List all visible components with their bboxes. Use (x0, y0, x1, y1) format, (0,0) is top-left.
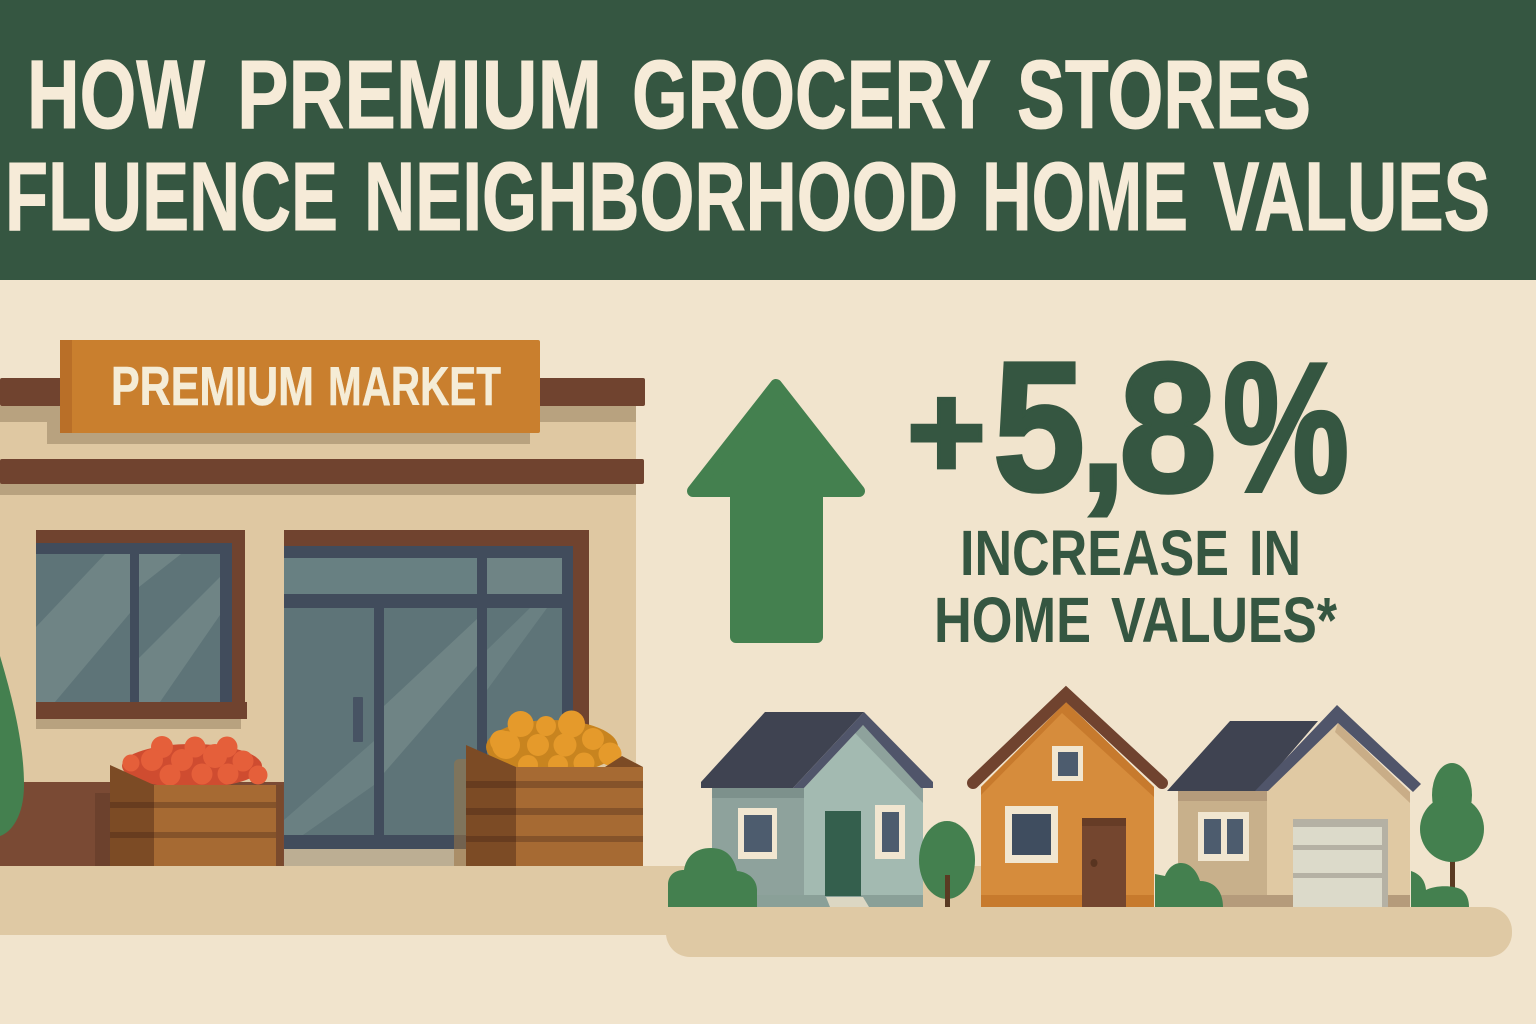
title line 1: GROCERY (632, 40, 991, 149)
tan house with garage (1167, 705, 1421, 907)
statistic: +5,8%: 5 (993, 323, 1085, 529)
blue-green house (701, 712, 933, 907)
title line 1: STORES (1017, 40, 1311, 149)
window sill shadow (36, 719, 241, 729)
store sign (60, 340, 540, 433)
door handle (353, 697, 363, 742)
roof bar (0, 378, 645, 406)
statistic caption: IN (1249, 517, 1301, 589)
door threshold (284, 849, 466, 866)
sign text: MARKET (328, 355, 501, 417)
sign shadow (47, 422, 530, 444)
left tree (0, 656, 24, 836)
statistic caption: VALUES* (1111, 584, 1337, 656)
title line 2: HOME (982, 142, 1188, 251)
orange fruit crate (466, 710, 643, 866)
crate shadow left (95, 793, 110, 866)
up arrow (693, 385, 859, 637)
house windows (1052, 746, 1083, 781)
sign text: PREMIUM (111, 355, 314, 417)
neighborhood houses (668, 694, 1484, 907)
red fruit crate (110, 736, 283, 866)
house door (1082, 818, 1126, 907)
bush: right (1411, 871, 1469, 907)
lower wall panel (0, 782, 284, 866)
orange house (973, 694, 1162, 907)
bush: middle (1155, 863, 1223, 907)
door step (826, 897, 869, 907)
statistic: +5,8%: % (1223, 324, 1349, 530)
title line 1: PREMIUM (237, 40, 602, 149)
title banner (0, 0, 1536, 280)
garage door (1293, 819, 1388, 907)
tree: right (1420, 763, 1484, 890)
awning band shadow (0, 483, 636, 495)
tree: middle (919, 821, 975, 907)
statistic: +5,8%: + (907, 356, 986, 507)
title line 2: NEIGHBORHOOD (364, 142, 958, 251)
house door (825, 811, 861, 896)
statistic caption (934, 517, 1337, 656)
glass entrance doors (284, 530, 589, 866)
window sill (36, 702, 247, 719)
title line 1: HOW (27, 40, 205, 149)
red fruit (122, 736, 268, 788)
house windows (738, 808, 777, 859)
ground: neighborhood street (666, 907, 1512, 957)
roof shadow (0, 406, 636, 422)
bush: left (668, 848, 757, 907)
statistic caption: INCREASE (960, 517, 1229, 589)
orange fruit (486, 710, 622, 775)
crate shadow right (454, 759, 466, 866)
house window (1198, 812, 1249, 861)
statistic caption: HOME (934, 584, 1091, 656)
left shop window (36, 530, 247, 729)
ground: strip behind houses (657, 866, 981, 908)
ground: store sidewalk (0, 866, 690, 935)
building wall (0, 405, 636, 866)
title line 2: FLUENCE (5, 142, 338, 251)
statistic: +5,8%: , (1080, 341, 1126, 525)
statistic: +5,8%: 8 (1119, 324, 1217, 530)
premium market storefront (0, 340, 645, 866)
awning band (0, 459, 644, 484)
